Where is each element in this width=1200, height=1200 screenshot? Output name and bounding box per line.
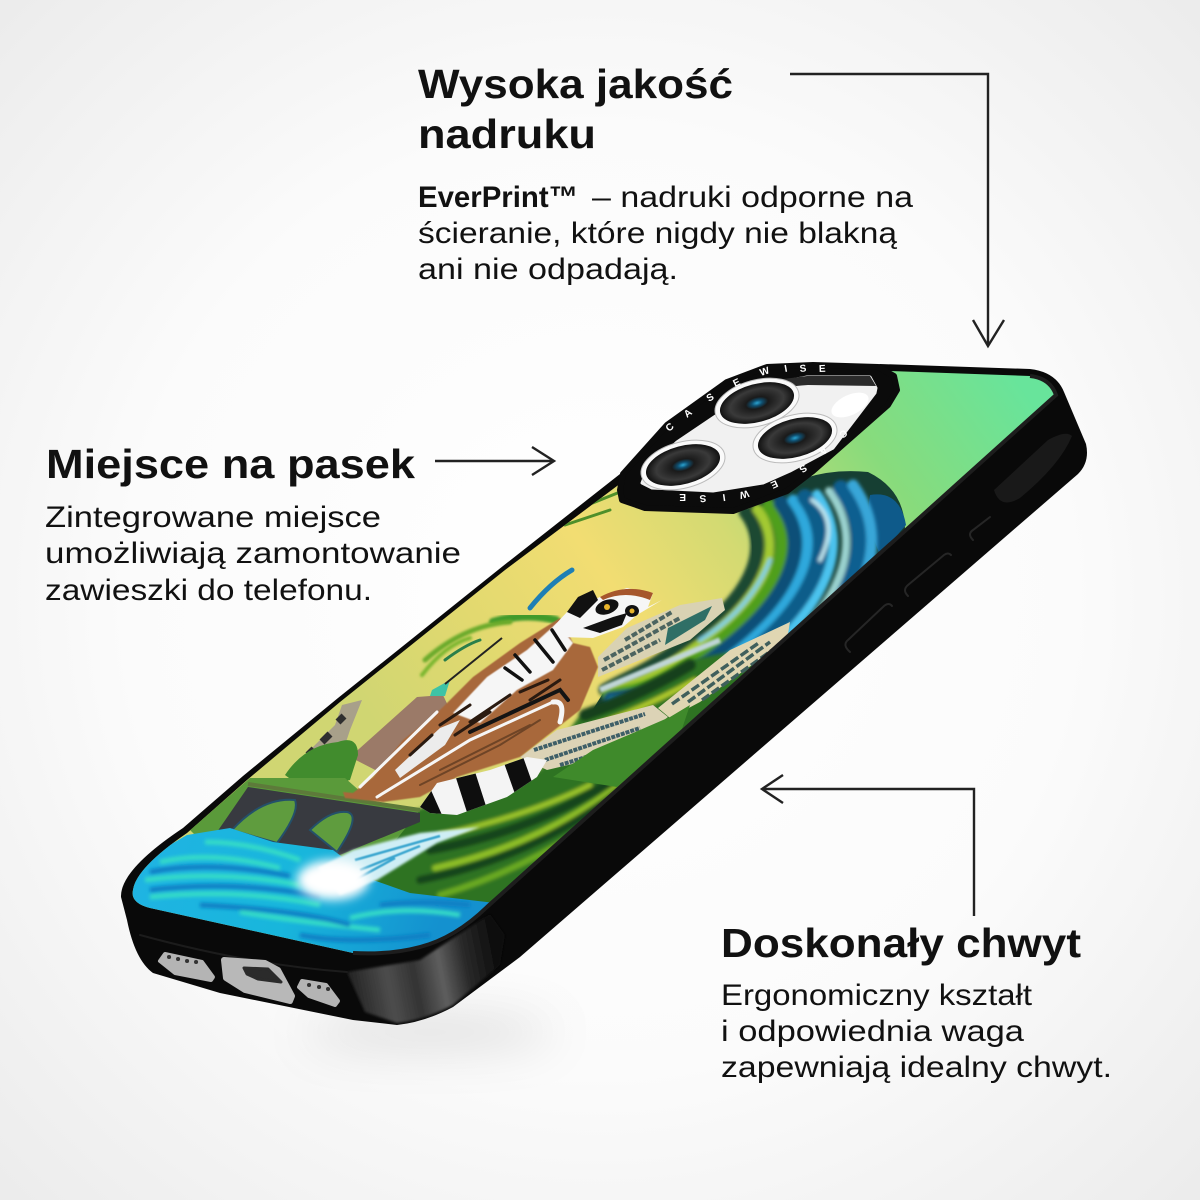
brand text top: CASEWISE (664, 363, 826, 434)
screen edge highlight (353, 376, 1056, 953)
lemur eyes (596, 599, 639, 617)
text block: grip description: i odpowiednia waga (721, 1015, 1024, 1048)
text block: grip description (721, 979, 1112, 1084)
text block: EverPrint description (418, 181, 913, 286)
brand text bottom: CASEWISE (679, 427, 849, 503)
arrow: print quality to phone (790, 74, 1004, 346)
lemur cap (600, 589, 653, 600)
art: tree right (553, 705, 690, 787)
art: lemur (343, 588, 662, 826)
rim shading (760, 376, 876, 392)
art: hill behind the bridge (190, 778, 418, 857)
camera window (642, 377, 876, 491)
text block: EverPrint description: ani nie odpadają. (418, 253, 678, 286)
art: lower green swirls (373, 648, 752, 902)
case side detail: buttons (140, 434, 1072, 972)
art: left building (306, 700, 362, 754)
lemur white chest (453, 623, 573, 723)
phone shadow (305, 1018, 555, 1046)
art: water (132, 828, 490, 953)
lemur body (343, 618, 598, 802)
lemur stripes and limbs (360, 630, 568, 797)
text block: EverPrint description: ścieranie, które nigdy nie blakną (418, 217, 897, 250)
case body (121, 364, 1087, 1025)
art: waterfall (297, 827, 480, 900)
text block: EverPrint description: EverPrint™ (418, 181, 578, 214)
text block: strap description: umożliwiają zamontowanie (45, 537, 461, 570)
art: tree left (285, 740, 358, 780)
speaker left (160, 954, 213, 980)
camera bump (620, 363, 897, 511)
heading: strap place: Miejsce na pasek (46, 441, 415, 487)
lens top (710, 370, 804, 436)
lemur head (553, 588, 662, 638)
art: big wave (594, 471, 906, 708)
camera flash (828, 387, 872, 423)
text block: strap description (45, 501, 461, 607)
heading: high print quality (418, 61, 733, 157)
printed artwork (132, 371, 1054, 953)
art: bridge (217, 784, 420, 855)
text block: EverPrint description: – nadruki odporne na (592, 181, 913, 214)
lemur ear (567, 590, 598, 618)
art: building right (658, 622, 790, 718)
text block: grip description: Ergonomiczny kształt (721, 979, 1033, 1012)
speaker right (299, 981, 338, 1005)
lens left (636, 432, 730, 498)
text block: strap description: Zintegrowane miejsce (45, 501, 381, 534)
heading: perfect grip: Doskonały chwyt (721, 920, 1081, 966)
arrow: strap place to phone (435, 447, 554, 475)
art: green leaf and blue feather (422, 490, 625, 675)
text block: grip description: zapewniają idealny chwyt. (721, 1051, 1112, 1084)
bridge arches (232, 800, 296, 843)
art: building lower (520, 705, 668, 770)
bottom ports (160, 954, 338, 1005)
phone case with printed artwork (100, 350, 1100, 1025)
waterfall foam (297, 860, 369, 900)
text block: strap description: zawieszki do telefonu. (45, 574, 372, 607)
arrow: grip to phone (762, 775, 974, 916)
lens right (748, 405, 842, 471)
charging port (224, 960, 292, 1001)
lemur snout (583, 613, 627, 633)
art: building upper (598, 598, 725, 677)
art: brown tower and spire (350, 638, 502, 775)
lemur tail (420, 757, 547, 815)
heading: high print quality: Wysoka jakość (418, 61, 733, 107)
heading: high print quality: nadruku (418, 111, 596, 157)
case bottom glossy corner (348, 920, 494, 1024)
charging port opening (244, 968, 281, 982)
